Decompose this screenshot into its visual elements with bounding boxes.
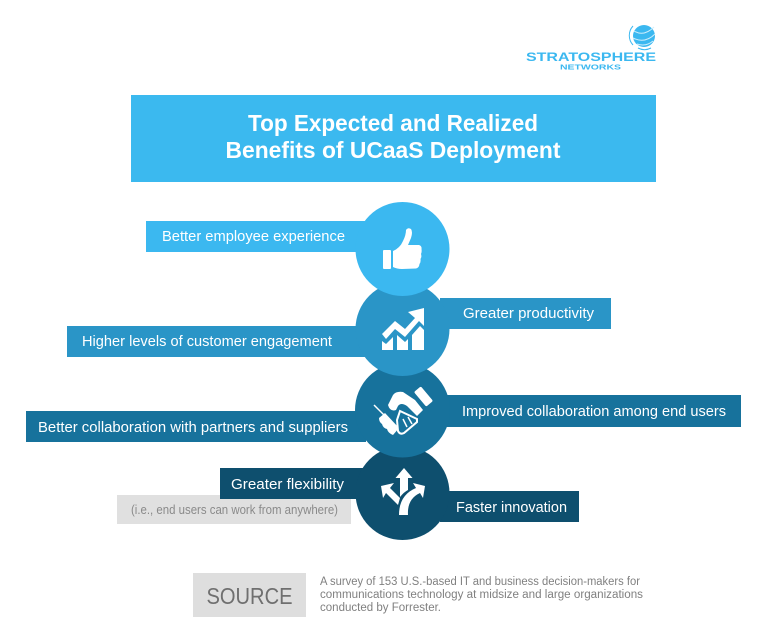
note: end users can work from anywhere: (i.e., end users can work from anywhere) bbox=[131, 502, 338, 517]
label bar: Faster innovation: Faster innovation bbox=[456, 500, 567, 516]
label bar: Greater productivity bbox=[440, 298, 611, 329]
label bar: Higher levels of customer engagement bbox=[67, 326, 367, 357]
logo name: STRATOSPHERE bbox=[526, 52, 656, 64]
circle 3 bbox=[355, 362, 450, 458]
label bar: Greater flexibility bbox=[117, 468, 370, 524]
source text: conducted by Forrester. bbox=[320, 602, 441, 614]
title line 2: Benefits of UCaaS Deployment bbox=[226, 137, 561, 163]
circle 1 bbox=[356, 202, 450, 296]
icon: globe bbox=[629, 25, 655, 50]
circle 4 bbox=[356, 446, 450, 540]
title banner bbox=[131, 95, 656, 182]
label bar: Better collaboration with partners and suppliers: Better collaboration with partners and suppliers bbox=[38, 420, 348, 436]
icon: handshake bbox=[374, 386, 433, 435]
title line 1: Top Expected and Realized bbox=[248, 110, 538, 136]
source label bbox=[193, 573, 306, 617]
label bar: Better employee experience bbox=[146, 221, 366, 252]
label bar: Improved collaboration among end users: Improved collaboration among end users bbox=[462, 404, 726, 420]
icon: diverging arrows bbox=[381, 468, 425, 515]
icon: growth chart bbox=[382, 308, 424, 350]
icon: thumbs up bbox=[383, 228, 422, 269]
label bar: Better collaboration with partners and suppliers bbox=[26, 411, 366, 442]
circle 2 bbox=[356, 282, 450, 376]
logo: Stratosphere Networks bbox=[526, 25, 656, 72]
label bar: Greater productivity: Greater productivity bbox=[463, 306, 595, 322]
label bar: Better employee experience: Better employee experience bbox=[162, 229, 345, 245]
source text: communications technology at midsize and large organizations bbox=[320, 589, 643, 601]
logo subname: NETWORKS bbox=[560, 64, 621, 72]
source text bbox=[320, 576, 643, 614]
label bar: Faster innovation bbox=[440, 491, 579, 522]
label bar: Higher levels of customer engagement: Higher levels of customer engagement bbox=[82, 334, 332, 350]
source text: A survey of 153 U.S.-based IT and business decision-makers for bbox=[320, 576, 640, 588]
note: end users can work from anywhere bbox=[117, 495, 351, 524]
label bar: Improved collaboration among end users bbox=[440, 395, 741, 427]
label bar: Greater flexibility: Greater flexibility bbox=[231, 477, 345, 493]
source label: SOURCE bbox=[206, 583, 292, 609]
